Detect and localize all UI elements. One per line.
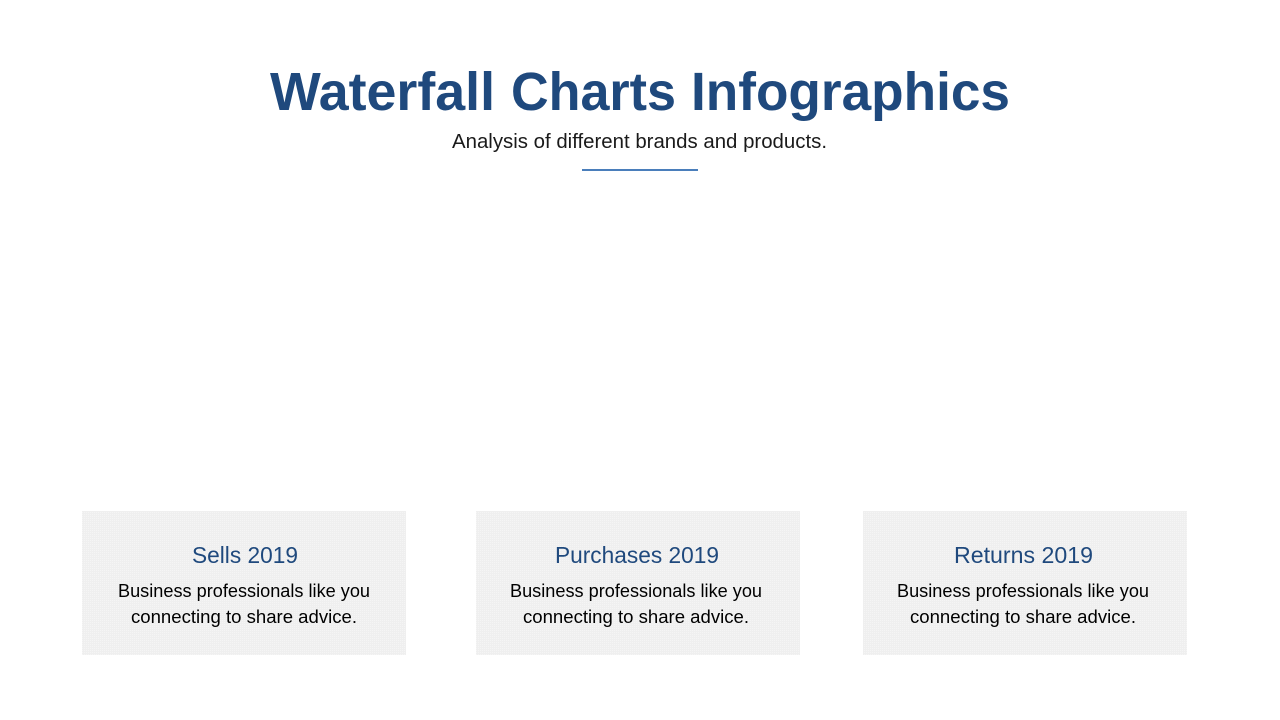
panel text: connecting to share advice. <box>131 606 357 627</box>
title: Infographics <box>691 62 1010 122</box>
panel text: Business professionals like you <box>510 580 762 601</box>
panel: Returns 2019 <box>863 511 1187 655</box>
panel background <box>476 511 800 655</box>
panel text: Business professionals like you <box>118 580 370 601</box>
panel heading: Sells 2019 <box>192 542 298 568</box>
title <box>270 62 1010 122</box>
panel background <box>863 511 1187 655</box>
panel text: connecting to share advice. <box>523 606 749 627</box>
panel heading: Returns 2019 <box>954 542 1093 568</box>
panel text: connecting to share advice. <box>910 606 1136 627</box>
title underline <box>582 169 698 171</box>
panel: Sells 2019 <box>82 511 406 655</box>
panel text <box>118 580 370 627</box>
panel heading: Purchases 2019 <box>555 542 719 568</box>
panel text <box>510 580 762 627</box>
title: Charts <box>511 62 676 122</box>
panel text: Business professionals like you <box>897 580 1149 601</box>
panel background <box>82 511 406 655</box>
title: Waterfall <box>270 62 495 122</box>
subtitle: Analysis of different brands and products. <box>452 131 827 153</box>
panel text <box>897 580 1149 627</box>
panel: Purchases 2019 <box>476 511 800 655</box>
